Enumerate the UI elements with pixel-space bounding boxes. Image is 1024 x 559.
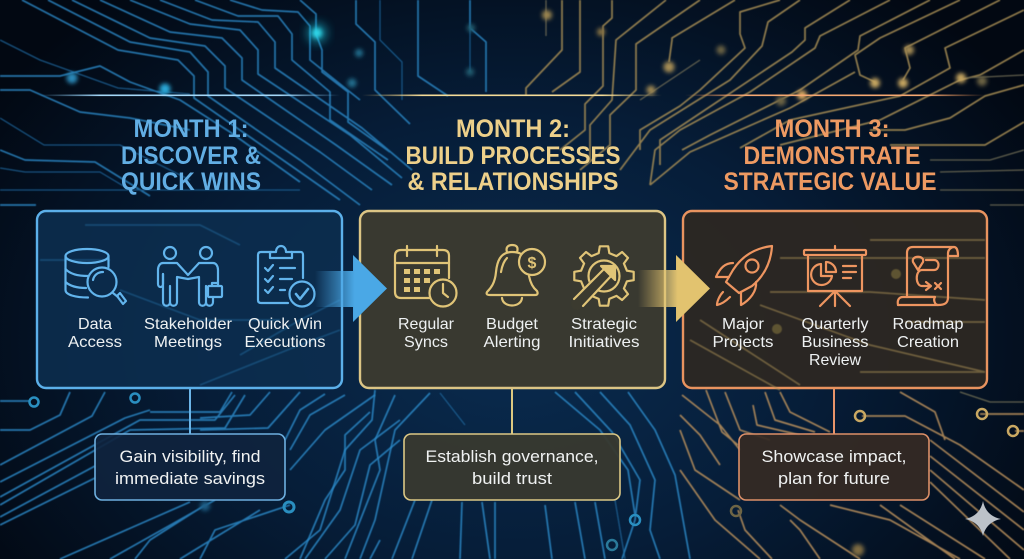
label: stakeholder meetings bbox=[144, 316, 233, 351]
label: major projects: Major bbox=[722, 316, 765, 333]
heading: month 3: DEMONSTRATE bbox=[744, 142, 920, 170]
heading: month 1: QUICK WINS bbox=[121, 168, 261, 196]
top divider: month 2 bbox=[362, 94, 662, 96]
panel: month 2 bbox=[360, 211, 665, 388]
label: strategic initiatives: Strategic bbox=[571, 316, 637, 333]
callout: month 2 bbox=[404, 434, 620, 500]
arrow: month 2 to month 3 bbox=[638, 255, 710, 322]
label: regular syncs: Regular bbox=[398, 316, 455, 333]
connector: month 2 bbox=[511, 388, 513, 434]
icon: budget bell: $ bbox=[528, 255, 537, 272]
callout: month 3: plan for future bbox=[778, 469, 890, 488]
heading: month 1 bbox=[121, 115, 261, 196]
top divider: month 3 bbox=[685, 94, 985, 96]
label: roadmap creation: Roadmap bbox=[892, 316, 964, 333]
callout: month 1 bbox=[95, 434, 285, 500]
label: quick win executions: Executions bbox=[244, 334, 326, 351]
circuit traces: bottom left bbox=[0, 392, 400, 559]
heading: month 3 bbox=[724, 115, 936, 196]
label: strategic initiatives bbox=[568, 316, 640, 351]
label: data access: Data bbox=[78, 316, 112, 333]
label: regular syncs bbox=[398, 316, 455, 351]
icon: rocket bbox=[716, 246, 772, 305]
heading: month 1: DISCOVER & bbox=[121, 142, 261, 170]
label: budget alerting: Budget bbox=[486, 316, 539, 333]
label: quarterly business review: Business bbox=[802, 334, 868, 351]
icon: sparkle watermark bbox=[965, 501, 1001, 536]
label: regular syncs: Syncs bbox=[404, 334, 448, 351]
heading: month 3: STRATEGIC VALUE bbox=[724, 168, 936, 196]
top divider: month 1 bbox=[40, 94, 340, 96]
label: quarterly business review: Review bbox=[809, 352, 861, 369]
icon: calendar clock bbox=[395, 246, 456, 306]
icon: presentation board bbox=[804, 246, 866, 306]
icon: handshake bbox=[158, 247, 222, 306]
label: stakeholder meetings: Meetings bbox=[154, 334, 222, 351]
label: quarterly business review: Quarterly bbox=[802, 316, 868, 333]
icon: database search bbox=[66, 249, 126, 304]
heading: month 2: MONTH 2: bbox=[456, 115, 570, 143]
icon: checklist clipboard bbox=[258, 246, 314, 306]
label: stakeholder meetings: Stakeholder bbox=[144, 316, 233, 333]
heading: month 2 bbox=[406, 115, 620, 196]
label: data access bbox=[68, 316, 122, 351]
label: data access: Access bbox=[68, 334, 122, 351]
label: quick win executions bbox=[244, 316, 326, 351]
callout: month 2: Establish governance, bbox=[426, 447, 598, 466]
label: budget alerting bbox=[484, 316, 540, 351]
icon: roadmap scroll bbox=[898, 247, 958, 305]
label: quarterly business review bbox=[802, 316, 868, 369]
heading: month 2: BUILD PROCESSES bbox=[406, 142, 620, 170]
arrow: month 1 to month 2 bbox=[315, 255, 387, 322]
heading: month 2: & RELATIONSHIPS bbox=[408, 168, 618, 196]
circuit traces: top right bbox=[526, 0, 1024, 205]
connector: month 1 bbox=[189, 388, 191, 434]
label: roadmap creation: Creation bbox=[897, 334, 959, 351]
label: budget alerting: Alerting bbox=[484, 334, 540, 351]
panel: month 1 bbox=[37, 211, 342, 388]
callout: month 1: Gain visibility, find bbox=[120, 447, 260, 466]
label: quick win executions: Quick Win bbox=[248, 316, 322, 333]
circuit traces: bottom right bbox=[680, 390, 1024, 559]
callout: month 3: Showcase impact, bbox=[762, 447, 906, 466]
icon: strategic gear bbox=[574, 246, 634, 306]
icon: budget bell bbox=[487, 245, 545, 306]
label: major projects: Projects bbox=[712, 334, 774, 351]
heading: month 1: MONTH 1: bbox=[134, 115, 248, 143]
label: roadmap creation bbox=[892, 316, 964, 351]
label: strategic initiatives: Initiatives bbox=[568, 334, 640, 351]
connector: month 3 bbox=[833, 388, 835, 434]
callout: month 3 bbox=[739, 434, 929, 500]
circuit traces: top left bbox=[0, 0, 486, 205]
heading: month 3: MONTH 3: bbox=[774, 115, 890, 143]
callout: month 2: build trust bbox=[472, 469, 552, 488]
circuit traces: bottom centre bbox=[285, 390, 690, 559]
panel: month 3 bbox=[683, 211, 987, 390]
label: major projects bbox=[712, 316, 774, 351]
callout: month 1: immediate savings bbox=[115, 469, 265, 488]
